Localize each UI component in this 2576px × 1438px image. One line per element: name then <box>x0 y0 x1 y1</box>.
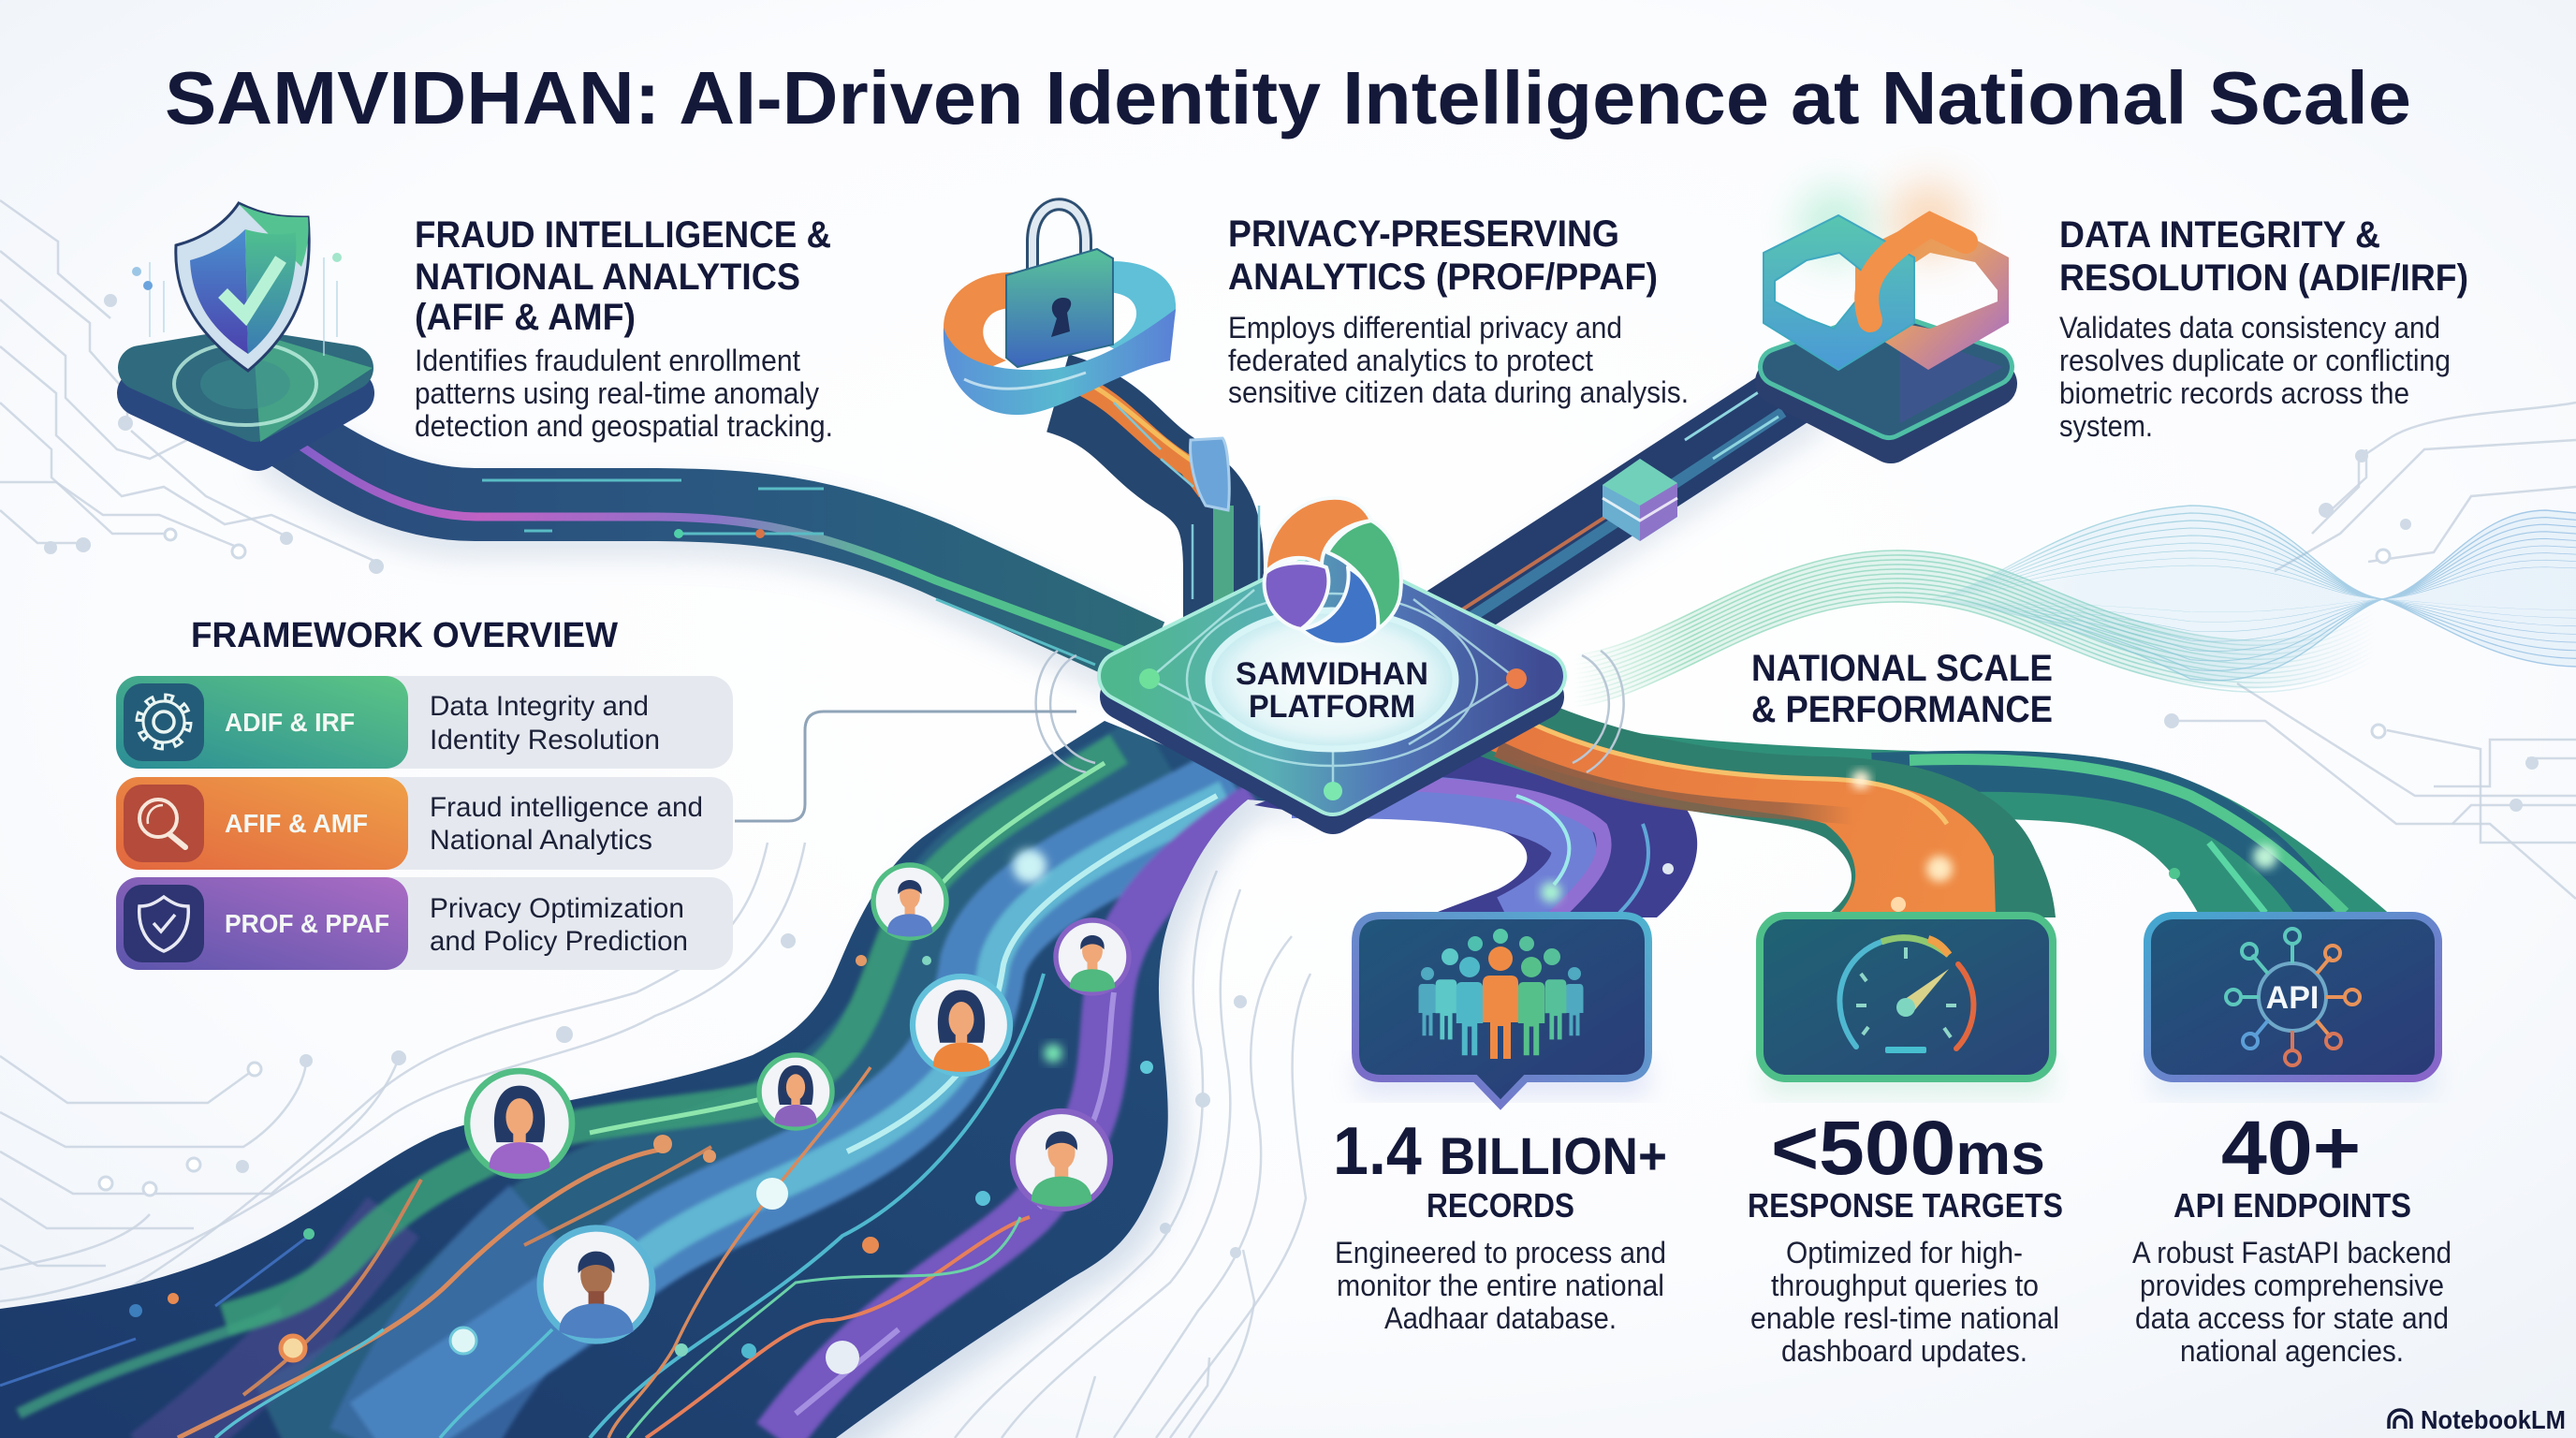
stat: under 500ms <box>1748 1106 2063 1368</box>
card: response targets <box>1760 916 2053 1078</box>
connector node on privacy road <box>1191 438 1229 510</box>
heading: data integrity: DATA INTEGRITY & <box>2059 214 2380 256</box>
row: AFIF & AMF: AFIF & AMF <box>225 809 368 838</box>
avatar: woman, purple shirt <box>467 1071 572 1176</box>
text: fraud intelligence description <box>415 344 833 443</box>
icon: swirl logo <box>1265 498 1401 645</box>
circuit pattern: lines along ribbon right <box>955 871 1310 1438</box>
avatar: woman, orange shirt <box>913 976 1010 1074</box>
platform label plate <box>1208 610 1456 749</box>
row: ADIF & IRF: Data Integrity and <box>430 691 649 722</box>
platform base <box>1123 594 1541 811</box>
icon: API hub <box>2226 929 2360 1065</box>
text: fraud intelligence description: patterns using real-time anomaly <box>415 376 819 410</box>
road: fraud intelligence <box>271 424 1149 670</box>
icon: padlock with ribbon <box>944 204 1176 415</box>
heading: fraud intelligence: NATIONAL ANALYTICS <box>415 257 800 298</box>
stat: 1.4 billion records: 1.4 BILLION+ <box>1333 1114 1667 1189</box>
connector to framework <box>735 712 1076 821</box>
text: API description: provides comprehensive <box>2140 1269 2444 1302</box>
text: response description: Optimized for high- <box>1786 1236 2023 1269</box>
heading: national scale: NATIONAL SCALE <box>1751 648 2053 689</box>
heading: privacy analytics: PRIVACY-PRESERVING <box>1228 213 1619 255</box>
text: data integrity description <box>2059 311 2451 443</box>
data wave <box>1573 506 2576 707</box>
road: response targets branch <box>1460 655 2056 917</box>
text: records description <box>1335 1236 1666 1335</box>
row: PROF & PPAF: PROF & PPAF <box>225 909 389 938</box>
row: AFIF & AMF <box>116 777 733 870</box>
heading: fraud intelligence: (AFIF & AMF) <box>415 297 636 338</box>
avatar: woman, purple shirt small <box>759 1055 832 1128</box>
stat: 40+ endpoints: API ENDPOINTS <box>2174 1186 2411 1225</box>
central platform <box>1123 573 1541 811</box>
NotebookLM mark: NotebookLM <box>2421 1405 2566 1434</box>
road: data integrity <box>1423 384 1812 648</box>
central platform: PLATFORM <box>1249 689 1415 725</box>
icon: gear <box>124 683 204 761</box>
text: response description: throughput queries to <box>1771 1269 2039 1302</box>
road: API branch <box>1460 693 2393 917</box>
row: AFIF & AMF: National Analytics <box>430 825 652 856</box>
text: API description <box>2132 1236 2452 1368</box>
card shadows <box>1357 1058 2434 1095</box>
platform label: SAMVIDHAN <box>1236 656 1428 692</box>
text: API description: data access for state and <box>2135 1301 2449 1335</box>
icon: speedometer <box>1839 938 1973 1053</box>
row: ADIF & IRF: Identity Resolution <box>430 725 660 756</box>
row: PROF & PPAF: Privacy Optimization <box>430 893 684 924</box>
text: privacy description <box>1228 311 1689 409</box>
title: SAMVIDHAN: AI-Driven Identity Intelligence at National Scale <box>165 56 2411 139</box>
stat: under 500ms: RESPONSE TARGETS <box>1748 1186 2063 1225</box>
text: response description: dashboard updates. <box>1781 1334 2027 1368</box>
heading: framework overview: FRAMEWORK OVERVIEW <box>191 616 618 655</box>
text: data integrity description: resolves duplicate or conflicting <box>2059 344 2451 377</box>
text: records description: Aadhaar database. <box>1384 1301 1617 1335</box>
row: PROF & PPAF: and Policy Prediction <box>430 926 688 957</box>
text: data integrity description: Validates data consistency and <box>2059 311 2440 345</box>
circuit pattern: upper right <box>2275 403 2576 571</box>
text: privacy description: Employs differential privacy and <box>1228 311 1622 345</box>
icon: shield on base plate <box>132 203 373 448</box>
ring: right <box>1855 215 2009 370</box>
circuit pattern: lower right <box>2164 683 2576 899</box>
text: data integrity description: biometric records across the <box>2059 376 2409 410</box>
text: records description: monitor the entire national <box>1337 1269 1664 1302</box>
platform link rings <box>735 651 1624 821</box>
ring: left <box>1764 215 1914 370</box>
heading: national scale: & PERFORMANCE <box>1751 689 2053 730</box>
text: fraud intelligence description: detection and geospatial tracking. <box>415 409 833 443</box>
text: fraud intelligence description: Identifies fraudulent enrollment <box>415 344 800 377</box>
stat: 1.4 billion records: RECORDS <box>1427 1186 1574 1225</box>
text: data integrity description: system. <box>2059 409 2153 443</box>
row: AFIF & AMF: Fraud intelligence and <box>430 792 703 823</box>
panel: framework overview rows <box>116 676 733 970</box>
avatar: man, blue shirt <box>540 1228 652 1341</box>
text: records description: Engineered to process and <box>1335 1236 1666 1269</box>
heading: data integrity: RESOLUTION (ADIF/IRF) <box>2059 257 2468 299</box>
row: ADIF & IRF: ADIF & IRF <box>225 708 355 737</box>
icon: linked rings on base plate <box>1764 183 2009 440</box>
stat: 40+ endpoints: 40+ <box>2221 1106 2361 1191</box>
avatar: man, blue shirt small <box>873 865 946 938</box>
text: response description <box>1750 1236 2059 1368</box>
stat: under 500ms: <500ms <box>1771 1106 2045 1191</box>
data cube on road <box>1603 459 1677 541</box>
circuit pattern: lower left <box>0 843 805 1339</box>
text: privacy description: federated analytics to protect <box>1228 344 1593 377</box>
heading: privacy analytics: ANALYTICS (PROF/PPAF) <box>1228 257 1658 298</box>
avatar: man, green shirt small <box>1056 920 1129 993</box>
heading: fraud intelligence: FRAUD INTELLIGENCE & <box>415 214 831 256</box>
card: records <box>1355 916 1648 1105</box>
text: API description: A robust FastAPI backend <box>2132 1236 2452 1269</box>
circuit pattern: upper left <box>0 200 384 574</box>
icon: shield <box>124 885 204 962</box>
icon: API hub: API <box>2266 980 2319 1016</box>
text: response description: enable resl-time national <box>1750 1301 2059 1335</box>
row: ADIF & IRF <box>116 676 733 769</box>
text: privacy description: sensitive citizen data during analysis. <box>1228 375 1689 409</box>
heading: national scale <box>1751 648 2053 730</box>
heading: data integrity <box>2059 214 2468 299</box>
heading: fraud intelligence <box>415 214 831 338</box>
text: API description: national agencies. <box>2180 1334 2404 1368</box>
platform top <box>1123 573 1541 790</box>
card: API endpoints <box>2147 916 2438 1078</box>
stat: 1.4 billion records <box>1333 1114 1667 1335</box>
citizen data ribbon <box>0 721 1325 1438</box>
icon: magnifier <box>124 785 204 862</box>
road: privacy analytics <box>1058 376 1259 674</box>
icon: crowd of people <box>1419 929 1584 1059</box>
heading: privacy analytics <box>1228 213 1658 298</box>
stat: 40+ endpoints <box>2132 1106 2452 1368</box>
avatars <box>467 865 1129 1341</box>
road: records branch <box>1254 749 1697 917</box>
avatar: man, green shirt <box>1013 1111 1110 1209</box>
row: PROF & PPAF <box>116 877 733 970</box>
